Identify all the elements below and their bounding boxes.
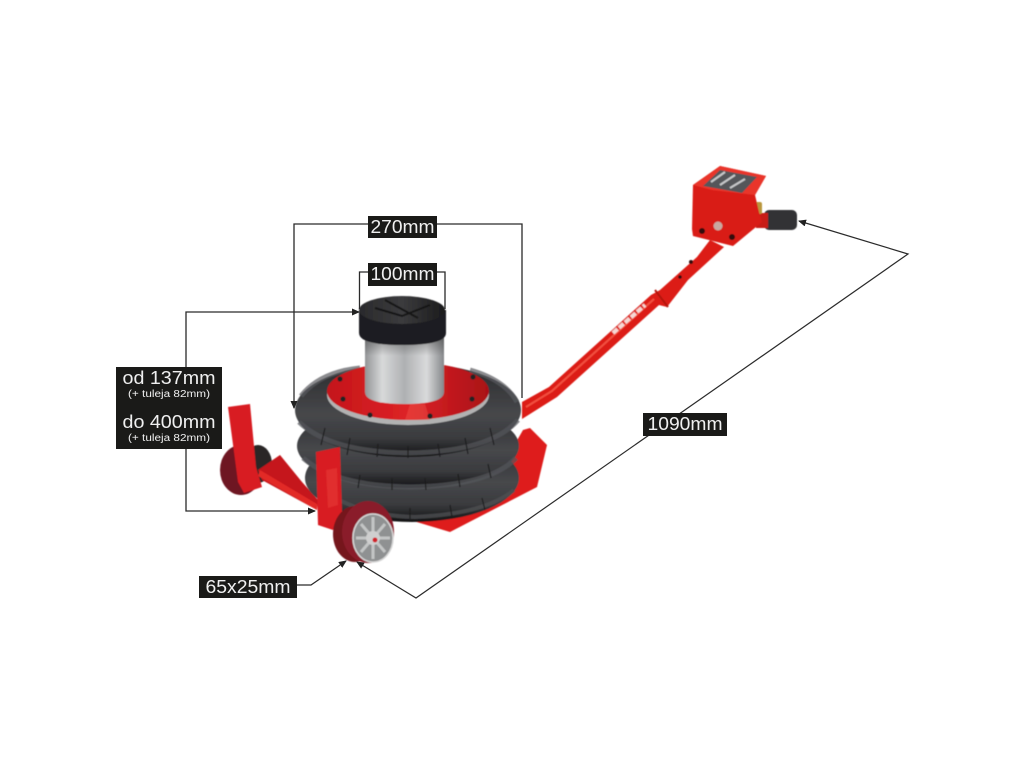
steel cylinder (365, 335, 444, 404)
label: 100mm: 100mm (370, 264, 434, 284)
black rubber cap (359, 296, 446, 345)
dimension line: 100mm (360, 272, 445, 309)
label: 1090mm: 1090mm (648, 414, 722, 434)
label: lift height range: (+ tuleja 82mm) (128, 389, 210, 400)
label: 270mm: 270mm (370, 217, 434, 237)
handle tube (522, 240, 724, 419)
red top plate with bolts (327, 362, 489, 425)
front frame and rear fender (228, 404, 318, 510)
rear wheel (220, 445, 272, 495)
label: lift height range: (+ tuleja 82mm) (128, 433, 210, 444)
dimension line: wheel size (297, 561, 346, 585)
label: lift height range (116, 367, 222, 449)
front wheel (333, 501, 394, 563)
label: lift height range: do 400mm (122, 412, 216, 432)
air bellows (295, 363, 521, 522)
front fender (316, 447, 342, 530)
dimension line: total length (357, 221, 908, 598)
tyre seams (321, 428, 494, 520)
dimension line: height range (186, 312, 359, 511)
label: 65x25mm: 65x25mm (206, 577, 290, 597)
base plate (410, 428, 547, 532)
dimension line: 270mm (294, 224, 522, 408)
handle head with valve (692, 166, 797, 246)
air jack product illustration (220, 166, 797, 563)
label: lift height range: od 137mm (122, 368, 216, 388)
